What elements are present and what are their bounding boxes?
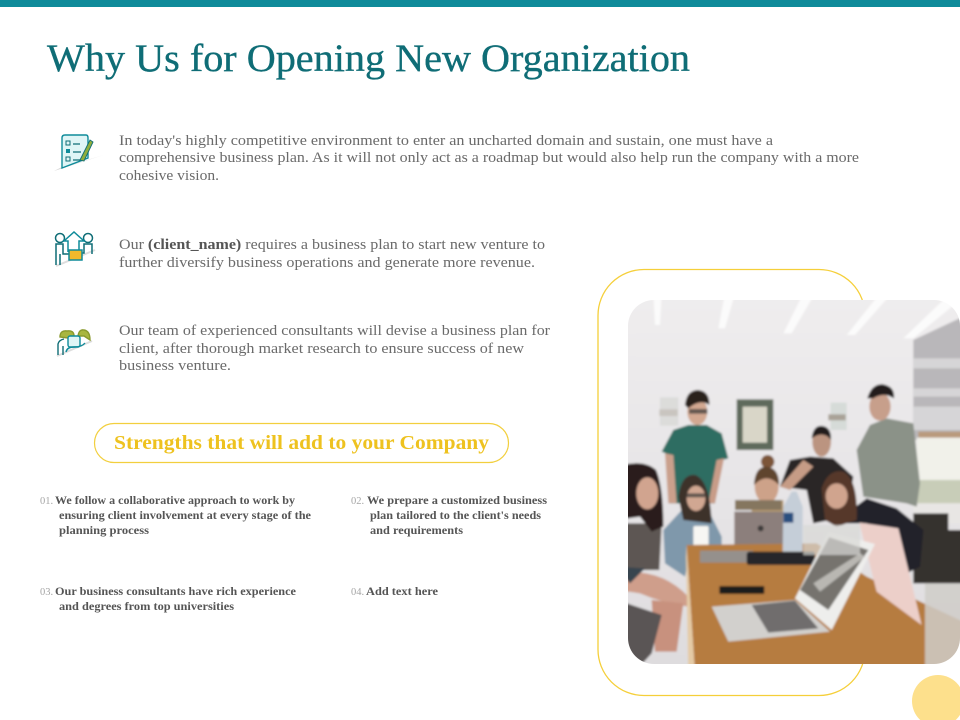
strength 04: 04.	[351, 587, 364, 598]
text block: team: business venture.	[119, 358, 231, 374]
text block: client	[119, 237, 545, 271]
strength 01: ensuring client involvement at every stage of the	[59, 510, 311, 522]
text block: intro: comprehensive business plan. As it will not only act as a roadmap but would also help run the company with a more	[119, 150, 859, 166]
leaning woman	[846, 497, 923, 573]
photo: team around a table	[613, 293, 960, 673]
front laptop	[712, 600, 830, 642]
strength 01: planning process	[59, 525, 150, 537]
text block: intro: In today's highly competitive environment to enter an uncharted domain and sustain, one must have a	[119, 133, 773, 149]
woman with glasses	[663, 508, 722, 577]
text block: intro: cohesive vision.	[119, 168, 219, 184]
bun woman and laptop	[761, 455, 774, 468]
top teal bar	[0, 0, 960, 7]
table	[687, 543, 960, 673]
strength 03: and degrees from top universities	[59, 601, 235, 613]
strength 02: plan tailored to the client's needs	[370, 510, 542, 522]
strength 03: Our business consultants have rich experience	[55, 586, 296, 598]
text block: team	[119, 323, 550, 374]
strength 03	[40, 586, 296, 613]
man right	[857, 418, 920, 507]
text block: client: further diversify business operations and generate more revenue.	[119, 255, 535, 271]
strengths heading pill	[94, 424, 508, 462]
strength 01	[40, 495, 311, 537]
icon: consultants group	[57, 330, 92, 356]
strength 02	[351, 495, 548, 537]
text block: intro	[119, 133, 859, 184]
yellow photo frame	[598, 270, 865, 696]
bottle	[783, 492, 803, 552]
text block: team: Our team of experienced consultants will devise a business plan for	[119, 323, 550, 339]
wall and ceiling	[613, 293, 960, 673]
woman far left	[628, 522, 663, 572]
yellow corner circle	[912, 675, 960, 720]
strength 01: We follow a collaborative approach to work by	[55, 495, 295, 507]
text block: team: client, after thorough market research to ensure success of new	[119, 341, 524, 357]
glass	[925, 583, 960, 673]
strength 02: and requirements	[370, 525, 464, 537]
pink laptop	[859, 523, 922, 625]
strength 01: 01.	[40, 496, 53, 507]
strengths heading pill: Strengths that will add to your Company	[114, 432, 490, 454]
strength 03: 03.	[40, 587, 53, 598]
title: Why Us for Opening New Organization	[47, 37, 690, 80]
strength 02: 02.	[351, 496, 364, 507]
text block: client: Our (client_name) requires a business plan to start new venture to	[119, 237, 545, 253]
icon: team with growth arrow	[56, 232, 95, 266]
strength 04: Add text here	[366, 586, 438, 598]
sconces and picture	[660, 397, 678, 426]
man left	[662, 425, 728, 503]
strength 02: We prepare a customized business	[367, 495, 548, 507]
icon: checklist	[54, 135, 104, 171]
standing woman	[780, 457, 853, 523]
